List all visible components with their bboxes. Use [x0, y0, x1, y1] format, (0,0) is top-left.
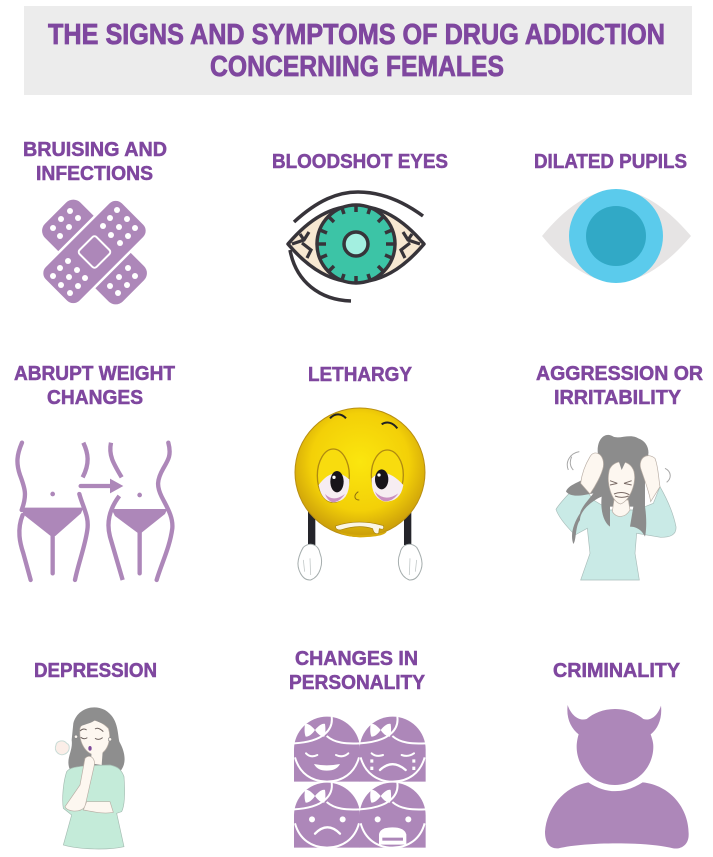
heading: changes in personality: [289, 647, 425, 694]
icon: crossed bandages: [38, 195, 151, 309]
heading: abrupt weight changes: CHANGES: [47, 386, 143, 409]
heading: criminality: CRIMINALITY: [553, 659, 680, 682]
heading: lethargy: LETHARGY: [308, 363, 412, 386]
illustration: irritated woman: [556, 435, 676, 580]
heading: aggression or irritability: [536, 362, 703, 409]
icon: devil silhouette: [545, 705, 689, 849]
icon: tired emoji: [295, 408, 425, 580]
face: crying: [360, 717, 426, 782]
icon: bloodshot eye: [288, 192, 424, 301]
heading: depression: DEPRESSION: [34, 659, 157, 682]
heading: abrupt weight changes: ABRUPT WEIGHT: [14, 362, 175, 385]
icon: four emotion faces: [294, 717, 426, 848]
heading: bloodshot eyes: BLOODSHOT EYES: [272, 150, 448, 173]
face: shocked: [360, 783, 426, 848]
heading: bruising and infections: [23, 138, 167, 185]
illustration: depressed woman: [55, 707, 125, 849]
title banner: [24, 6, 692, 95]
icon: dilated pupil eye: [542, 189, 691, 283]
heading: changes in personality: PERSONALITY: [289, 671, 425, 694]
face: sad: [294, 783, 360, 848]
heading: bruising and infections: BRUISING AND: [23, 138, 167, 161]
heading: dilated pupils: DILATED PUPILS: [534, 150, 687, 173]
heading: aggression or irritability: IRRITABILITY: [554, 386, 681, 409]
heading: changes in personality: CHANGES IN: [295, 647, 418, 670]
face: happy: [294, 717, 360, 782]
icon: waist before and after: [17, 443, 172, 580]
heading: abrupt weight changes: [14, 362, 175, 409]
title banner: CONCERNING FEMALES: [210, 51, 504, 83]
heading: bruising and infections: INFECTIONS: [36, 162, 153, 185]
heading: aggression or irritability: AGGRESSION OR: [536, 362, 703, 385]
